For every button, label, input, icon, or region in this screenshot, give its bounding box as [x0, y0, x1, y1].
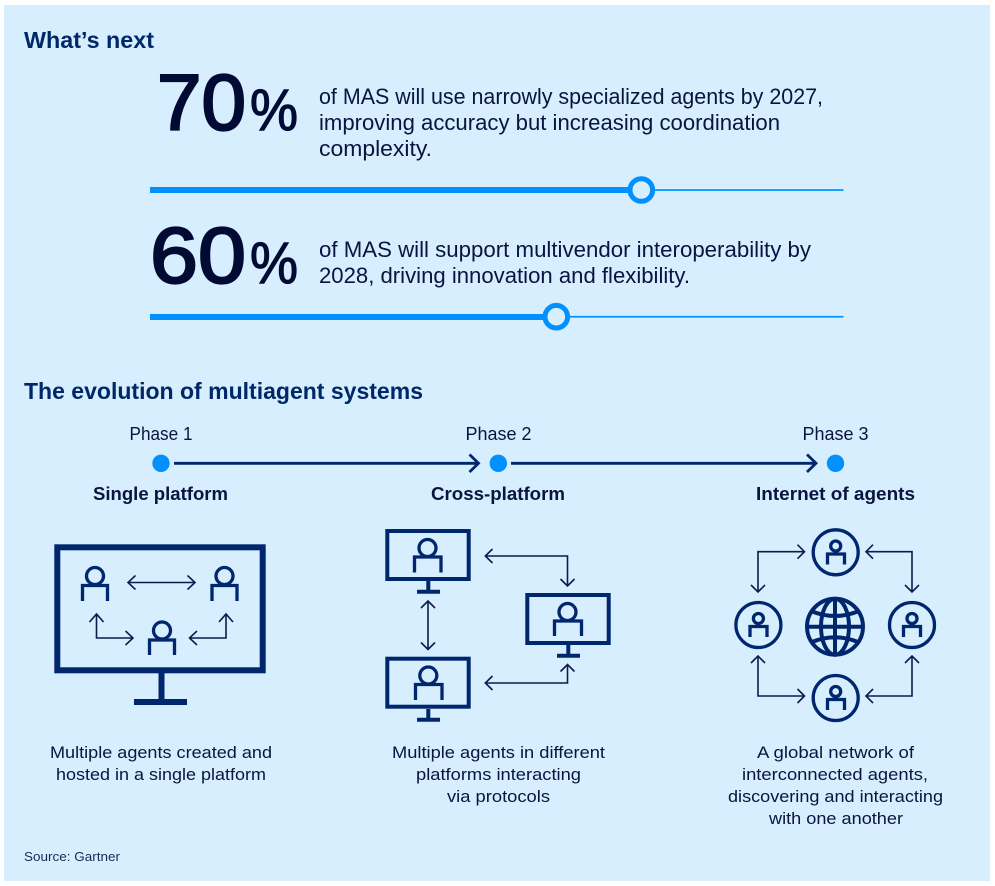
progress bar: 60 percent — [150, 305, 844, 328]
text: phase 1 description: Multiple agents created and — [50, 743, 272, 762]
text: phase 3 description — [728, 743, 943, 828]
arrow: left to bottom — [751, 656, 804, 703]
monitor bottom left — [387, 659, 469, 720]
agent node right — [890, 602, 934, 648]
number: 60%: 60 — [150, 210, 246, 300]
arrow: phase 2 to phase 3 — [511, 454, 816, 472]
agent node left — [736, 602, 781, 648]
heading: what's next: What’s next — [24, 27, 154, 53]
text: phase 1 description: hosted in a single platform — [56, 765, 266, 784]
agent left — [82, 568, 108, 601]
icon: globe — [806, 598, 864, 656]
phase 2 marker: Phase 2 — [466, 424, 532, 444]
text: phase 3 description: interconnected agents, — [742, 765, 928, 784]
phase 2 marker — [466, 424, 532, 472]
text: phase 3 description: A global network of — [757, 743, 914, 762]
agent node bottom — [813, 676, 858, 720]
arrow: left to top — [751, 545, 804, 592]
text: 70 percent description: improving accuracy but increasing coordination — [319, 110, 780, 135]
monitor top left — [387, 531, 469, 592]
text: 60 percent description — [319, 237, 811, 288]
icon: internet of agents network — [736, 530, 934, 720]
icon: single platform monitor — [57, 547, 263, 702]
arrow: top left to right — [485, 549, 574, 586]
statistic: 60 percent — [150, 210, 844, 328]
text: 70 percent description: of MAS will use narrowly specialized agents by 2027, — [319, 84, 823, 109]
phase 3 marker — [802, 424, 868, 472]
text: phase 3 description: with one another — [768, 809, 903, 828]
label: cross-platform: Cross-platform — [431, 483, 565, 504]
heading: evolution of multiagent systems: The evolution of multiagent systems — [24, 378, 423, 404]
number: 70%: % — [250, 78, 298, 143]
number: 60%: % — [250, 231, 298, 296]
arrow: bottom left to right — [485, 664, 574, 690]
phase 1 marker: Phase 1 — [130, 424, 192, 444]
arrow: phase 1 to phase 2 — [174, 454, 478, 472]
number: 70%: 70 — [157, 58, 246, 146]
arrow: left to center agent — [90, 614, 133, 645]
text: 60 percent description: 2028, driving innovation and flexibility. — [319, 263, 690, 288]
monitor right — [527, 595, 609, 656]
timeline — [130, 424, 868, 472]
text: phase 2 description — [392, 743, 605, 806]
text: 60 percent description: of MAS will support multivendor interoperability by — [319, 237, 811, 262]
agent right — [212, 568, 237, 601]
progress bar: 70 percent — [150, 179, 844, 201]
arrow: left to right agent — [128, 576, 195, 590]
number: 70% — [157, 58, 298, 146]
text: phase 1 description — [50, 743, 272, 784]
text: 70 percent description: complexity. — [319, 136, 432, 161]
text: phase 2 description: platforms interacting — [416, 765, 581, 784]
arrow: right to bottom — [866, 656, 919, 703]
phase 3 marker: Phase 3 — [802, 424, 868, 444]
icon: cross-platform monitors — [387, 531, 609, 720]
text: phase 2 description: via protocols — [447, 787, 550, 806]
arrow: top left to bottom left — [421, 601, 435, 650]
label: internet of agents: Internet of agents — [756, 483, 915, 504]
text: 70 percent description — [319, 84, 823, 161]
number: 60% — [150, 210, 298, 300]
phase 1 marker — [130, 424, 192, 472]
agent node top — [813, 530, 858, 575]
arrow: right to top — [866, 545, 919, 592]
source note: Source: Gartner — [24, 849, 121, 864]
statistic: 70 percent — [150, 58, 844, 201]
label: single platform: Single platform — [93, 483, 228, 504]
agent center — [150, 622, 174, 655]
text: phase 3 description: discovering and interacting — [728, 787, 943, 806]
arrow: right to center agent — [190, 614, 233, 645]
text: phase 2 description: Multiple agents in different — [392, 743, 605, 762]
